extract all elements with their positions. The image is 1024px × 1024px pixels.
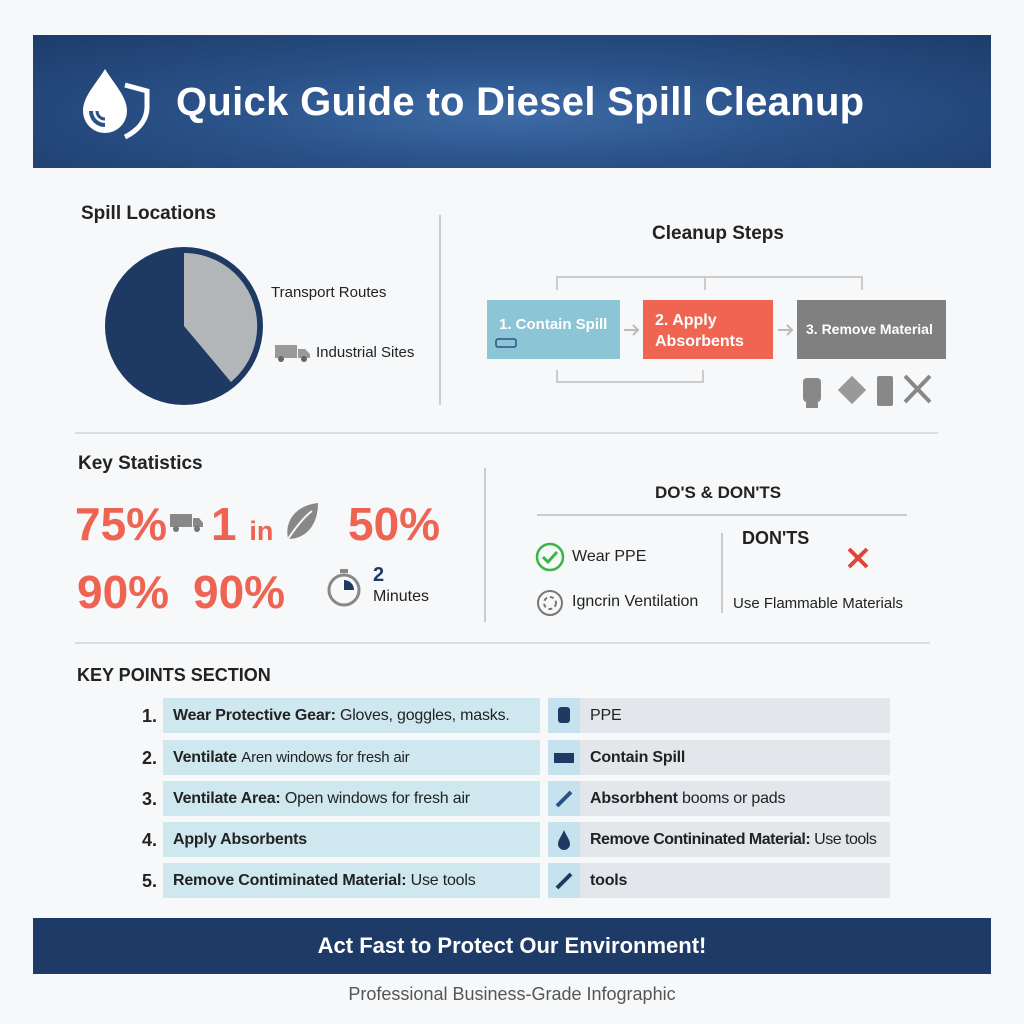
key point numbers [142,706,157,891]
step 3: 3. Remove Material [806,321,933,337]
panel: key statistics: 50% [348,498,440,550]
panel: key statistics [75,453,440,618]
panel: dos and donts: Use Flammable Materials [733,595,903,612]
panel: cleanup steps: Cleanup Steps [652,223,784,244]
panel: dos and donts: DON'TS [742,528,809,548]
panel: key statistics: 75% [75,498,167,550]
icon: leaf [287,503,318,539]
step 1 [487,300,620,359]
panel: dos and donts: DO'S & DON'TS [655,483,781,502]
panel: spill locations: Spill Locations [81,203,216,224]
title: Quick Guide to Diesel Spill Cleanup [176,80,864,124]
key point numbers: 4. [142,830,157,850]
panel: key statistics: 1 in [211,498,273,550]
key point rows right [548,698,890,733]
pie chart [105,247,263,405]
panel: spill locations: Industrial Sites [316,344,414,361]
subtitle: Professional Business-Grade Infographic [348,984,676,1004]
text: Ventilate Aren windows for fresh air [173,749,409,766]
panel: spill locations: Transport Routes [271,284,386,301]
icon: truck [170,514,203,532]
text: Ventilate Area: Open windows for fresh air [173,790,470,807]
footer banner: Act Fast to Protect Our Environment! [318,933,706,958]
panel: key statistics: Key Statistics [78,453,203,474]
footer banner [33,918,991,974]
step 3 [797,300,946,359]
panel: key statistics: 90% [77,566,169,618]
icons: tools [803,374,932,408]
header [33,35,991,168]
heading: key points: KEY POINTS SECTION [77,665,271,685]
text: Remove Contiminated Material: Use tools [173,872,476,889]
key point rows left: Wear Protective Gear: Gloves, goggles, masks. [173,707,510,724]
icon: check [536,542,564,572]
panel: dos and donts: Wear PPE [572,548,646,565]
panel: cleanup steps [487,223,946,408]
panel: dos and donts: Igncrin Ventilation [572,593,698,610]
icon: ventilation [537,590,563,616]
key point rows left [163,698,540,733]
step 2: 2. Apply [655,312,717,329]
text: Apply Absorbents [173,831,307,848]
panel: dos and donts [536,483,907,616]
key point numbers: 5. [142,871,157,891]
key point numbers: 2. [142,748,157,768]
panel: key statistics: 2 [373,564,384,586]
icon: x [848,548,868,568]
text: Remove Contininated Material: Use tools [590,831,876,848]
panel: key statistics: 90% [193,566,285,618]
text: Contain Spill [590,749,685,766]
step 2 [643,300,773,359]
icon: truck [275,345,310,362]
panel: spill locations [81,203,414,405]
panel: key statistics: Minutes [373,588,429,605]
text: Absorbhent booms or pads [590,790,785,807]
step 2: Absorbents [655,333,744,350]
key point numbers: 1. [142,706,157,726]
icon: stopwatch [328,569,360,606]
key point rows right: PPE [590,707,621,724]
text: tools [590,872,627,889]
icon: drop and shield [83,69,150,140]
step 1: 1. Contain Spill [499,316,607,333]
key point numbers: 3. [142,789,157,809]
